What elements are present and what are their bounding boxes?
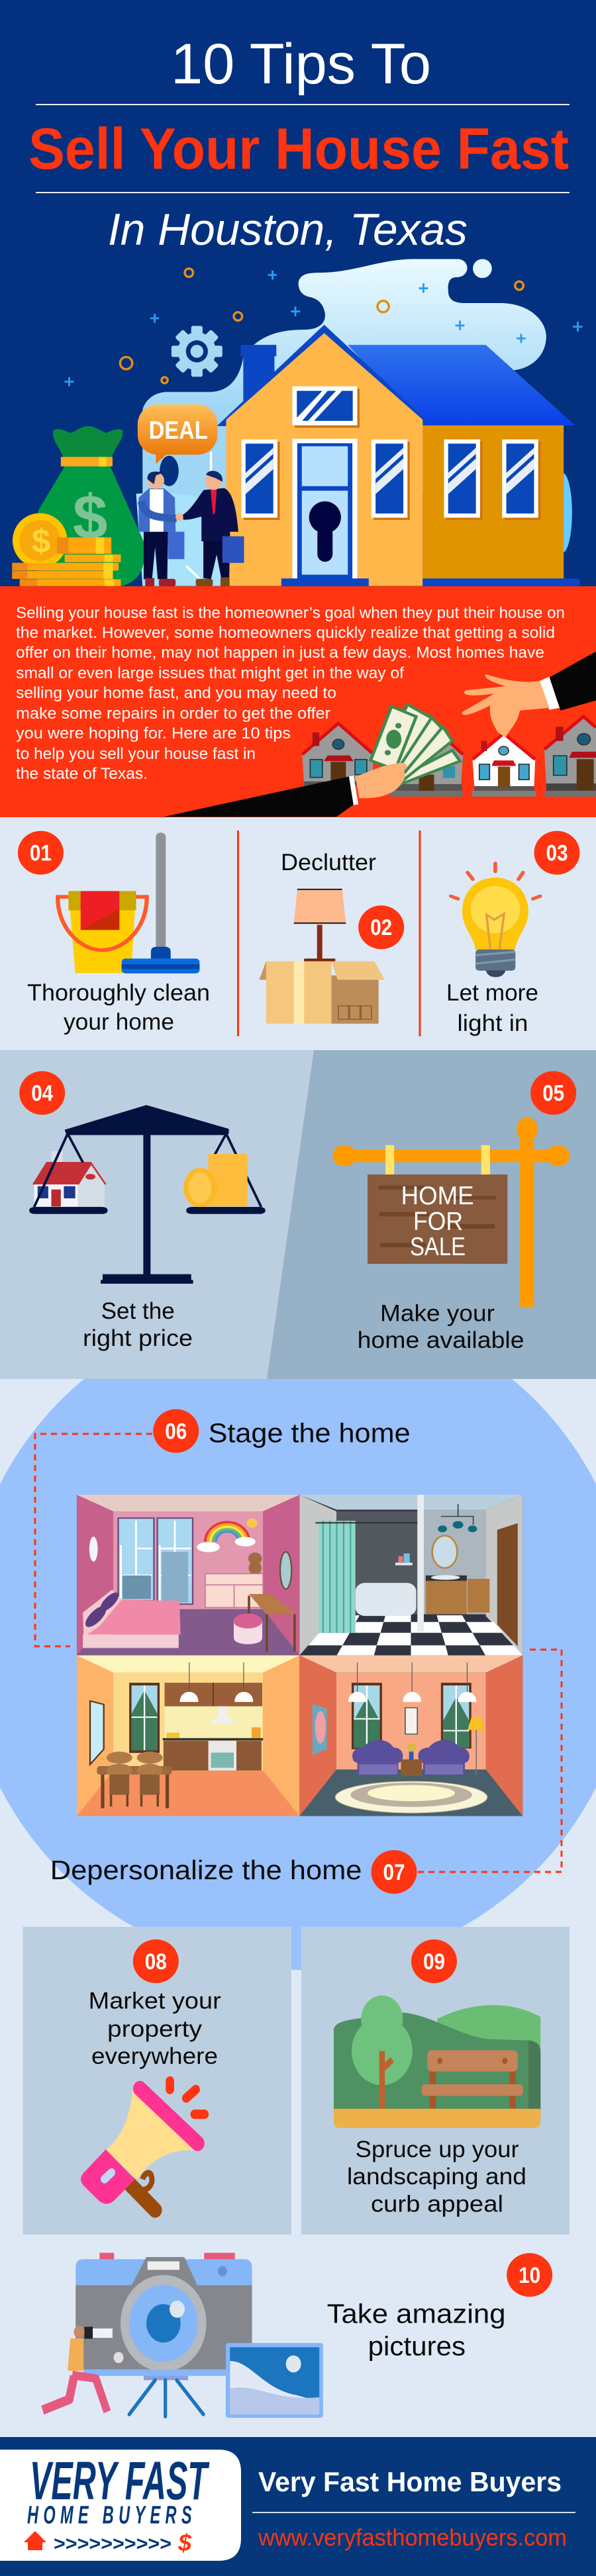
number 04: 04 bbox=[31, 1081, 53, 1106]
gray house behind money bbox=[389, 724, 463, 797]
label: everywhere bbox=[91, 2043, 218, 2069]
sign text: SALE bbox=[410, 1233, 466, 1261]
tip 5 bbox=[332, 1071, 576, 1353]
cloud backdrop bbox=[142, 259, 546, 532]
intro text: the market. However, some homeowners quickly realize that getting a solid bbox=[16, 624, 555, 642]
connector dashed lines bbox=[35, 1434, 562, 1872]
number 07: 07 bbox=[383, 1860, 405, 1885]
intro text: to help you sell your house fast in bbox=[16, 745, 256, 763]
room: bathroom bbox=[299, 1495, 522, 1656]
number 03 bbox=[534, 831, 580, 875]
label: Take amazing bbox=[327, 2299, 506, 2329]
photographer bbox=[42, 2326, 113, 2412]
label bbox=[83, 1298, 193, 1351]
label bbox=[27, 980, 210, 1035]
website: www.veryfasthomebuyers.com bbox=[258, 2524, 567, 2551]
number 10 bbox=[507, 2253, 552, 2297]
icon: park bench bbox=[334, 1996, 540, 2128]
label: landscaping and bbox=[347, 2164, 526, 2190]
icon: lamp in box bbox=[259, 889, 385, 1024]
intro text bbox=[16, 604, 565, 783]
panel: intro bbox=[0, 586, 596, 817]
panel: tip 9 bbox=[301, 1927, 570, 2235]
title line 3: In Houston, Texas bbox=[108, 204, 468, 255]
label: Declutter bbox=[281, 850, 376, 875]
intro text: Selling your house fast is the homeowner’s goal when they put their house on bbox=[16, 604, 565, 622]
label bbox=[327, 2299, 506, 2361]
icon: money bag: $ bbox=[73, 482, 107, 553]
icon: money bag: $ bbox=[32, 522, 50, 560]
sparkles bbox=[120, 269, 523, 383]
money fan bbox=[371, 705, 460, 785]
title line 1: 10 Tips To bbox=[171, 32, 431, 96]
logo: >>>>>>>>>> bbox=[54, 2533, 172, 2555]
label: right price bbox=[83, 1325, 193, 1351]
tip 3 bbox=[446, 831, 580, 1036]
logo: $ bbox=[177, 2529, 192, 2556]
house bbox=[217, 325, 579, 587]
sign text: FOR bbox=[413, 1207, 463, 1236]
icon: megaphone bbox=[81, 2081, 205, 2210]
speech bubble: deal bbox=[138, 404, 217, 464]
number 04 bbox=[19, 1071, 65, 1115]
number 07 bbox=[371, 1850, 417, 1894]
icon: gear bbox=[172, 326, 223, 377]
people shaking hands bbox=[139, 470, 244, 586]
number 01 bbox=[18, 831, 64, 875]
label: Make your bbox=[380, 1301, 495, 1326]
number 08: 08 bbox=[145, 1949, 167, 1975]
intro text: small or even large issues that might get in the way of bbox=[16, 664, 404, 682]
logo: VERY FAST bbox=[30, 2451, 209, 2511]
intro text: offer on their home, may not happen in just a few days. Most homes have bbox=[16, 644, 544, 662]
number 09: 09 bbox=[423, 1949, 445, 1975]
arm upper with hand bbox=[462, 652, 596, 738]
icon: for sale sign bbox=[332, 1117, 570, 1307]
intro text: the state of Texas. bbox=[16, 765, 148, 783]
number 05 bbox=[530, 1071, 576, 1115]
intro text: selling your home fast, and you may need to bbox=[16, 684, 336, 702]
label: Spruce up your bbox=[356, 2137, 519, 2162]
number 06 bbox=[153, 1409, 199, 1453]
label bbox=[358, 1301, 524, 1353]
number 06: 06 bbox=[165, 1419, 187, 1444]
logo bbox=[0, 2450, 241, 2561]
number 10: 10 bbox=[519, 2263, 540, 2288]
label: Market your bbox=[89, 1988, 221, 2014]
number 05: 05 bbox=[542, 1081, 564, 1106]
room: living room bbox=[299, 1656, 522, 1816]
panel: tips 1 to 3 bbox=[0, 817, 596, 1050]
panel: tip 8 bbox=[23, 1927, 291, 2235]
white house bbox=[472, 733, 536, 797]
hero illustration: house deal bbox=[12, 259, 582, 587]
label: stage: Stage the home bbox=[209, 1417, 411, 1448]
icon: money bag bbox=[12, 426, 145, 586]
icon: house bbox=[24, 2531, 46, 2550]
panel: tip 10 bbox=[42, 2253, 552, 2418]
illustration: four rooms bbox=[77, 1495, 522, 1816]
number 03: 03 bbox=[546, 840, 568, 866]
speech bubble: deal: DEAL bbox=[149, 417, 208, 445]
intro text: make some repairs in order to get the offer bbox=[16, 705, 330, 723]
label: light in bbox=[457, 1010, 528, 1036]
label bbox=[89, 1988, 221, 2069]
sign text bbox=[401, 1182, 474, 1261]
title line 2: Sell Your House Fast bbox=[28, 116, 569, 181]
panel: tips 4 and 5 bbox=[0, 1050, 596, 1379]
label bbox=[347, 2137, 526, 2217]
room: bedroom bbox=[77, 1495, 299, 1656]
label: depersonalize: Depersonalize the home bbox=[50, 1855, 362, 1885]
number 01: 01 bbox=[30, 840, 52, 866]
label bbox=[446, 980, 538, 1036]
tip 4 bbox=[19, 1071, 266, 1351]
icon: bucket and mop bbox=[58, 832, 199, 973]
sign text: HOME bbox=[401, 1182, 474, 1210]
gray house right bbox=[544, 717, 596, 797]
label: home available bbox=[358, 1327, 524, 1353]
intro text: you were hoping for. Here are 10 tips bbox=[16, 725, 291, 742]
room: kitchen bbox=[77, 1656, 299, 1816]
company name: Very Fast Home Buyers bbox=[258, 2466, 562, 2497]
tip 1 bbox=[18, 831, 210, 1035]
logo: HOME BUYERS bbox=[27, 2501, 197, 2529]
icon: camera and photographer bbox=[42, 2253, 323, 2418]
icon: balance scale bbox=[29, 1105, 266, 1284]
number 02 bbox=[358, 905, 404, 949]
label: property bbox=[107, 2016, 203, 2042]
tip 2 bbox=[259, 850, 404, 1024]
panel: footer bbox=[0, 2437, 596, 2576]
gray house left bbox=[302, 723, 373, 785]
label: Let more bbox=[446, 980, 538, 1006]
label: Set the bbox=[101, 1298, 175, 1324]
number 08 bbox=[133, 1939, 179, 1983]
panel: header bbox=[0, 0, 596, 587]
panel: bottom section background with circle bbox=[0, 1302, 596, 2437]
label: Thoroughly clean bbox=[27, 980, 210, 1006]
number 02: 02 bbox=[370, 915, 392, 940]
number 09 bbox=[411, 1939, 457, 1983]
illustration: houses and money bbox=[164, 652, 596, 817]
label: your home bbox=[64, 1009, 174, 1035]
label: curb appeal bbox=[371, 2192, 503, 2217]
arm lower bbox=[164, 763, 407, 817]
icon: light bulb bbox=[451, 864, 540, 977]
tips 6 and 7: staging bbox=[35, 1409, 562, 1894]
label: pictures bbox=[368, 2331, 466, 2361]
